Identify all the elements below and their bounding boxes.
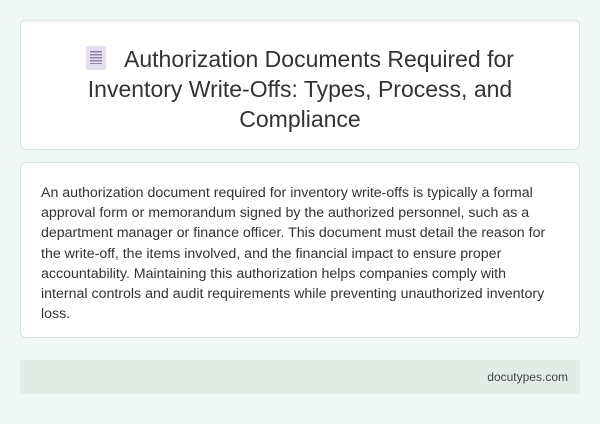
icon: document (86, 46, 106, 70)
panel: title (20, 20, 580, 150)
text block: An authorization document required for inventory write-offs is typically a formal approval form or memorandum signed by the authorized personnel, such as a department manager or finance officer. This document must detail the reason for the write-off, the items involved, and the financial impact to ensure proper accountability. Maintaining this authorization helps companies comply with internal controls and audit requirements while preventing unauthorized inventory loss. (41, 185, 545, 322)
panel: description (20, 162, 580, 338)
title: Authorization Documents Required for Inventory Write-Offs: Types, Process, and Compliance (88, 46, 514, 132)
footer (20, 360, 580, 394)
footer: docutypes.com (487, 370, 568, 384)
